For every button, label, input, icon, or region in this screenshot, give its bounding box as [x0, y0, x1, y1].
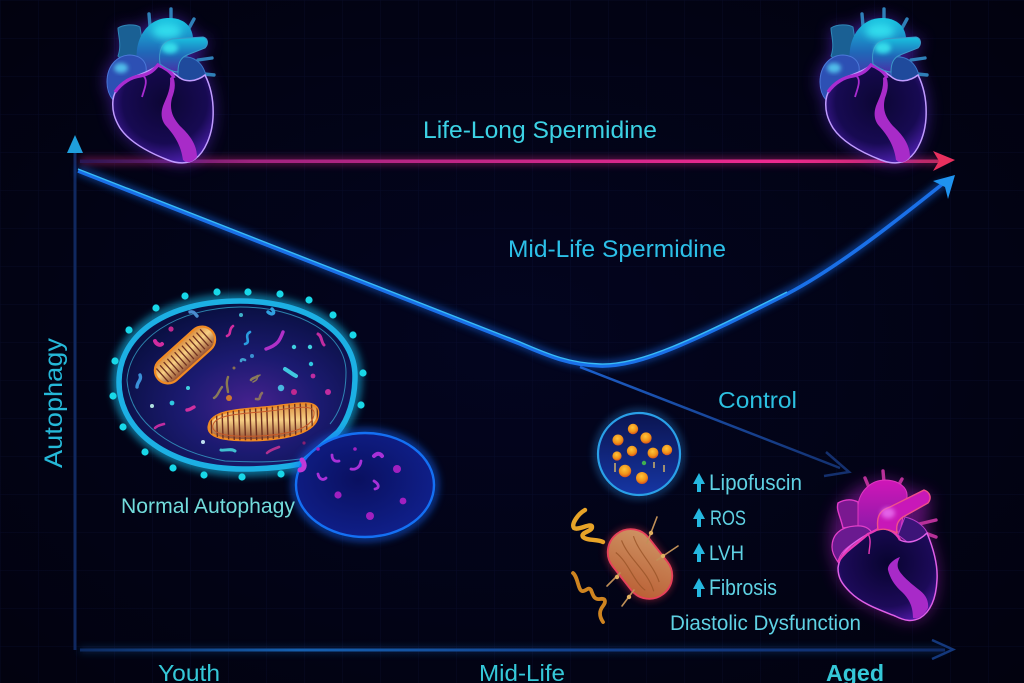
squiggles	[573, 510, 603, 542]
heart: top right, healthy	[819, 9, 927, 163]
autophagosome vesicle	[295, 432, 435, 538]
mitochondrion large	[205, 403, 322, 440]
text: normal autophagy label: Normal Autophagy	[121, 495, 295, 518]
vesicle glow	[295, 432, 435, 538]
x axis arrow	[80, 640, 953, 659]
heart: top left, healthy	[106, 9, 214, 163]
heart: aged, diseased magenta	[831, 471, 937, 620]
control declining arrow	[580, 367, 849, 476]
life-long spermidine pink arrow	[80, 151, 955, 171]
y axis arrow	[67, 135, 83, 650]
mitochondrion body	[597, 518, 683, 610]
mitochondrion sparks	[607, 517, 678, 606]
mid-life spermidine curve	[78, 169, 955, 366]
text: lvh: LVH	[709, 542, 744, 565]
text: life-long spermidine label: Life-Long Spermidine	[423, 117, 657, 144]
text: fibrosis: Fibrosis	[709, 575, 777, 600]
text: control label: Control	[718, 387, 797, 413]
mitochondrion small	[150, 321, 220, 389]
normal autophagy cell	[109, 288, 367, 481]
inner membrane	[127, 307, 346, 462]
text: mid-life spermidine label: Mid-Life Spermidine	[508, 236, 726, 263]
damaged mitochondrion with squiggles	[573, 510, 683, 622]
text: lipofuscin: Lipofuscin	[709, 470, 802, 495]
cell body	[119, 301, 355, 469]
cell glow	[117, 299, 357, 471]
vesicle body	[296, 433, 434, 537]
text: diastolic dysfunction: Diastolic Dysfunction	[670, 612, 861, 635]
text: ros: ROS	[710, 507, 746, 530]
cell particles	[137, 309, 324, 453]
membrane dots	[109, 288, 367, 481]
vesicle cargo	[300, 454, 382, 489]
lipofuscin dots	[612, 424, 672, 484]
lipofuscin granule circle	[597, 412, 681, 496]
text: y axis label autophagy: Autophagy	[40, 337, 68, 468]
upward arrows list	[693, 473, 705, 597]
